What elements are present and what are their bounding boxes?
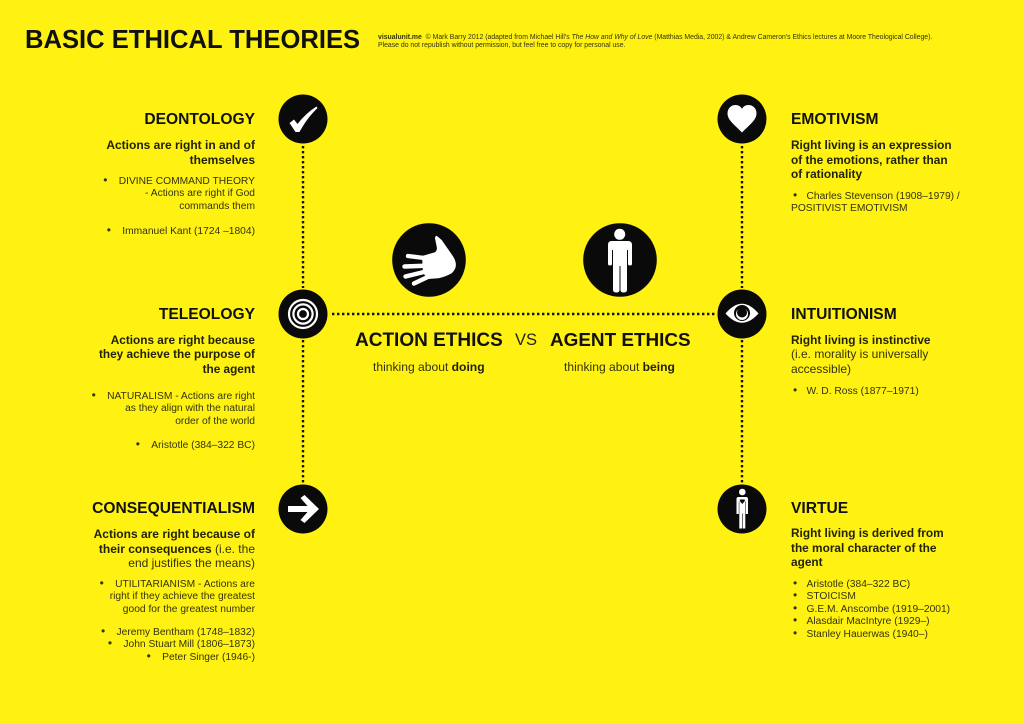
summary: Actions are right because of (94, 527, 255, 541)
list: as they align with the natural (125, 403, 255, 414)
list: • (92, 388, 96, 402)
credit text: Please do not republish without permission, but feel free to copy for personal use. (378, 42, 625, 49)
list: • (103, 172, 107, 186)
summary: Right living is an expression (791, 138, 952, 152)
list: • (793, 588, 797, 602)
list: Charles Stevenson (1908–1979) / (806, 190, 960, 202)
summary: of rationality (791, 167, 862, 181)
icon: eye (718, 290, 766, 338)
summary: their consequences (i.e. the (99, 542, 255, 556)
list: NATURALISM - Actions are right (107, 390, 255, 402)
title: BASIC ETHICAL THEORIES (25, 26, 360, 54)
list: order of the world Aristotle (384–322 BC) (151, 416, 255, 450)
panel: intuitionism (791, 306, 931, 396)
list: • (793, 188, 797, 202)
summary (94, 527, 256, 570)
list: John Stuart Mill (1806–1873) (123, 639, 255, 650)
list: good for the greatest number Jeremy Bentham (1748–1832) (117, 604, 255, 638)
icon: hand (392, 223, 466, 297)
list: - Actions are right if God (145, 188, 255, 199)
list: Stanley Hauerwas (1940–) (806, 628, 928, 640)
vs label: VS (515, 331, 537, 349)
list: W. D. Ross (1877–1971) (806, 386, 919, 396)
panel: emotivism (791, 111, 960, 214)
list (92, 388, 255, 450)
icon: target (278, 290, 328, 338)
list: DIVINE COMMAND THEORY (119, 176, 255, 186)
panel: teleology (92, 306, 255, 450)
list: • (136, 436, 140, 450)
list (100, 576, 255, 662)
list (791, 188, 960, 214)
summary (791, 332, 931, 376)
list: • (793, 600, 797, 614)
summary: the moral character of the (791, 540, 936, 554)
credit text (378, 34, 932, 49)
summary (791, 526, 944, 569)
list: UTILITARIANISM - Actions are (115, 578, 255, 590)
icon: virtue person with heart (718, 484, 766, 534)
heading: VIRTUE (791, 500, 848, 517)
summary: of the emotions, rather than (791, 152, 948, 166)
caption: doing: thinking about doing (373, 360, 485, 374)
summary: Actions are right because (111, 332, 255, 346)
list: • (100, 576, 104, 590)
summary: themselves (190, 152, 255, 166)
list: Peter Singer (1946-) (162, 652, 255, 662)
summary: Actions are right in and of (106, 138, 255, 152)
dotted connectors (303, 146, 742, 483)
summary: Right living is derived from (791, 526, 944, 540)
list: • (107, 222, 111, 236)
heading: DEONTOLOGY (144, 111, 255, 128)
list: • (793, 382, 797, 396)
list: • (101, 624, 105, 638)
list: Aristotle (384–322 BC) (806, 578, 910, 590)
heading: agent ethics: AGENT ETHICS (550, 330, 691, 351)
summary: they achieve the purpose of (99, 347, 255, 361)
icon: agent person (583, 223, 657, 297)
summary: agent (791, 555, 823, 569)
list (793, 576, 950, 640)
heading: action ethics: ACTION ETHICS (355, 330, 503, 351)
icon: arrow (278, 484, 328, 534)
summary: the agent (203, 362, 255, 376)
summary (791, 138, 952, 181)
summary: Right living is instinctive (791, 332, 931, 346)
summary (106, 138, 256, 166)
heading: INTUITIONISM (791, 306, 897, 323)
heading: EMOTIVISM (791, 111, 879, 128)
list (103, 172, 255, 236)
list: Alasdair MacIntyre (1929–) (806, 616, 930, 627)
list: POSITIVIST EMOTIVISM (791, 203, 908, 214)
list: • (793, 613, 797, 627)
summary: end justifies the means) (128, 556, 255, 570)
list: G.E.M. Anscombe (1919–2001) (806, 604, 950, 614)
summary: accessible) (791, 362, 851, 376)
summary: (i.e. morality is universally (791, 347, 928, 361)
panel: consequentialism (92, 500, 256, 662)
list: STOICISM (806, 591, 856, 602)
icon: heart (718, 94, 766, 144)
panel: deontology (103, 111, 256, 236)
list: commands them Immanuel Kant (1724 –1804) (122, 200, 255, 236)
panel: virtue (791, 500, 950, 640)
summary (99, 332, 255, 376)
list: • (793, 626, 797, 640)
list: • (108, 636, 112, 650)
heading: TELEOLOGY (159, 306, 255, 323)
heading: CONSEQUENTIALISM (92, 500, 255, 517)
list: • (147, 648, 151, 662)
credit text: visualunit.me © Mark Barry 2012 (adapted from Michael Hill's The How and Why of Love (Matthias Media, 2002) & Andrew Cameron's Ethics lectures at Moore Theological College). (378, 34, 932, 40)
caption: being: thinking about being (564, 360, 675, 374)
icon: check (278, 94, 328, 144)
list: • (793, 576, 797, 590)
list: right if they achieve the greatest (110, 591, 255, 602)
